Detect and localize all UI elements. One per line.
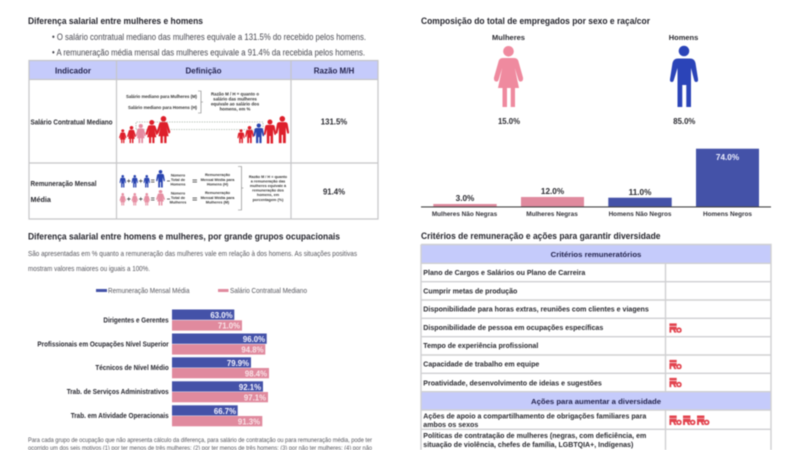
text block: bullets — [52, 32, 366, 58]
rows: critérios: Tempo de experiência profissional — [423, 341, 538, 350]
row: remuneração mensal média: porcentagem (%) — [253, 198, 284, 202]
group: profissionais nível superior — [37, 334, 267, 355]
row: remuneração mensal média: Razão M / H = quanto — [249, 175, 288, 179]
row: remuneração mensal média: Remuneração — [205, 173, 231, 177]
row: remuneração mensal média: Número — [171, 192, 186, 196]
bar chart: razão por grupo ocupacional — [37, 310, 269, 426]
row: remuneração mensal média: homens, em — [257, 193, 280, 197]
bar chart: sexo e raça/cor: 74.0% — [716, 153, 740, 162]
group: técnicos de nível médio: Técnicos de Nível Médio — [95, 365, 169, 372]
rows: critérios: Disponibilidade de pessoa em ocupações específicas — [423, 323, 603, 332]
icon: cálculo homens — [120, 170, 170, 188]
heading: critérios: Critérios de remuneração e ações para garantir diversidade — [421, 231, 660, 242]
group: técnicos de nível médio — [95, 357, 269, 378]
legend: Remuneração Mensal Média — [108, 286, 190, 295]
text block: explicação: São apresentadas em % quanto a remuneração das mulheres vale em relação à dos homens. As situações positivas — [28, 249, 357, 258]
icon: marcador disponibilidade de pessoa — [669, 323, 682, 333]
text block: explicação — [28, 249, 357, 273]
rows: ações: ambos os sexos — [423, 420, 478, 429]
rows: ações: Ações de apoio a compartilhamento de obrigações familiares para — [423, 412, 647, 420]
row: remuneração mensal média: Total de — [171, 178, 185, 182]
rows: ações: Políticas de contratação de mulheres (negras, com deficiência, em — [423, 431, 646, 440]
group: dirigentes e gerentes — [103, 310, 242, 331]
row: salário contratual mediano — [30, 91, 347, 144]
text block: explicação: mostram valores maiores ou iguais a 100%. — [28, 264, 150, 273]
group: técnicos de nível médio: 98.4% — [245, 370, 267, 378]
icon: marcador capacidade de trabalho — [669, 360, 682, 369]
row: salário contratual mediano: Razão M / H = quanto o — [211, 92, 259, 96]
icon: homens 85%: Homens — [669, 33, 698, 42]
table header: Definição — [185, 66, 222, 76]
icon: cálculo mulheres — [120, 190, 170, 206]
bar chart: sexo e raça/cor: Mulheres Negras — [526, 211, 578, 218]
group: serviços administrativos: 97.1% — [244, 394, 266, 402]
panel: critérios de remuneração e ações — [421, 231, 771, 450]
row: remuneração mensal média: Mensal Média para — [201, 196, 235, 200]
row: remuneração mensal média: Mensal Média para — [201, 178, 235, 182]
group: profissionais nível superior: Profissionais em Ocupações Nível Superior — [37, 342, 169, 348]
header: ações para aumentar a diversidade: Ações para aumentar a diversidade — [531, 397, 662, 406]
rows: ações: situação de violência, chefes de família, LGBTQIA+, Indígenas) — [423, 440, 634, 449]
group: serviços administrativos — [67, 381, 268, 402]
panel: diferença salarial entre mulheres e homens — [28, 16, 378, 219]
row: salário contratual mediano: 131.5% — [321, 118, 347, 126]
row: remuneração mensal média: a remuneração das — [251, 180, 285, 184]
text block: nota: Para cada grupo de ocupação que não apresenta cálculo da diferença, para salário de contratação ou para remuneração média, pode ter — [28, 437, 372, 444]
bar chart: sexo e raça/cor: Homens Não Negros — [609, 211, 672, 218]
rows: critérios: Disponibilidade para horas extras, reuniões com clientes e viagens — [423, 305, 649, 314]
icon: grupo de mulheres — [119, 116, 170, 143]
group: atividade operacionais: 91.3% — [238, 418, 260, 426]
group: serviços administrativos: Trab. de Serviços Administrativos — [67, 389, 169, 396]
row: remuneração mensal média: Mulheres (M) — [206, 200, 230, 204]
row: remuneração mensal média — [30, 166, 345, 210]
row: remuneração mensal média: Total de — [171, 196, 185, 200]
icon: homens 85%: 85.0% — [673, 117, 695, 126]
bar chart: sexo e raça/cor: 11.0% — [629, 188, 652, 197]
table: indicadores — [29, 60, 378, 219]
bar chart: sexo e raça/cor: Homens Negros — [703, 211, 752, 218]
icon: marcador proatividade — [669, 378, 682, 387]
bar chart: sexo e raça/cor — [421, 149, 771, 218]
text block: bullets: • A remuneração média mensal das mulheres equivale a 91.4% da recebida pelos homens. — [52, 48, 365, 58]
rows: critérios: Proatividade, desenvolvimento de ideias e sugestões — [423, 378, 602, 387]
legend — [96, 286, 307, 295]
rows: ações — [423, 412, 647, 449]
legend: Salário Contratual Mediano — [230, 286, 307, 295]
row: remuneração mensal média: Média — [30, 195, 52, 204]
icon: mulheres 15% — [492, 33, 525, 126]
row: remuneração mensal média: 91.4% — [323, 188, 345, 196]
heading: diferença salarial: Diferença salarial entre mulheres e homens — [28, 16, 203, 27]
rows: critérios: Capacidade de trabalho em equipe — [423, 360, 539, 369]
row: remuneração mensal média: Remuneração — [205, 191, 231, 195]
group: profissionais nível superior: 94.8% — [241, 346, 264, 355]
row: salário contratual mediano: salário das mulheres — [213, 96, 257, 102]
bar chart: sexo e raça/cor: 3.0% — [456, 194, 475, 203]
row: remuneração mensal média: Homens (H) — [207, 182, 229, 186]
bar chart: sexo e raça/cor: 12.0% — [541, 187, 565, 196]
panel: composição do total de empregados — [421, 16, 771, 218]
icon: mulheres 15%: 15.0% — [498, 117, 520, 126]
table header: Razão M/H — [314, 66, 354, 76]
row: remuneração mensal média: remuneração dos — [252, 188, 284, 192]
group: atividade operacionais — [71, 405, 262, 426]
text block: bullets: • O salário contratual mediano das mulheres equivale a 131.5% do recebido pelos homens. — [52, 32, 366, 42]
row: salário contratual mediano: Salário mediano para Mulheres (M) — [126, 94, 198, 99]
heading: composição: Composição do total de empregados por sexo e raça/cor — [421, 16, 650, 27]
table header — [55, 66, 354, 76]
row: remuneração mensal média: Número — [171, 174, 186, 178]
group: atividade operacionais: 66.7% — [214, 407, 236, 416]
rows: critérios — [423, 268, 649, 387]
group: dirigentes e gerentes: 63.0% — [210, 311, 233, 320]
group: serviços administrativos: 92.1% — [239, 383, 261, 392]
table: critérios remuneratórios — [421, 244, 771, 450]
table header: Indicador — [55, 66, 91, 76]
rows: critérios: Plano de Cargos e Salários ou Plano de Carreira — [423, 268, 586, 277]
heading: grandes grupos ocupacionais: Diferença salarial entre homens e mulheres, por grande grupos ocupacionais — [28, 232, 340, 242]
row: remuneração mensal média: Homens — [171, 182, 185, 186]
row: salário contratual mediano: homens, em % — [220, 106, 250, 112]
text block: nota — [28, 437, 372, 450]
icon: grupo de homens — [237, 116, 289, 144]
row: remuneração mensal média: Remuneração Mensal — [30, 179, 96, 188]
group: dirigentes e gerentes: Dirigentes e Gerentes — [103, 318, 169, 324]
header: critérios remuneratórios: Critérios remuneratórios — [551, 250, 641, 259]
group: atividade operacionais: Trab. em Atividade Operacionais — [71, 413, 169, 420]
row: remuneração mensal média: Mulheres — [170, 200, 186, 204]
rows: critérios: Cumprir metas de produção — [423, 286, 518, 295]
row: remuneração mensal média: mulheres equivale à — [250, 184, 287, 188]
row: salário contratual mediano: Salário mediano para Homens (H) — [128, 105, 198, 110]
icon: mulheres 15%: Mulheres — [492, 33, 525, 42]
bar chart: sexo e raça/cor: Mulheres Não Negras — [432, 211, 498, 218]
panel: grupos ocupacionais — [28, 232, 372, 450]
row: salário contratual mediano: equivale ao salário dos — [211, 102, 260, 106]
icon: homens 85% — [669, 33, 698, 126]
group: profissionais nível superior: 96.0% — [243, 335, 265, 344]
group: técnicos de nível médio: 79.9% — [227, 359, 249, 368]
row: salário contratual mediano: Salário Contratual Mediano — [30, 118, 113, 126]
group: dirigentes e gerentes: 71.0% — [218, 322, 240, 331]
icon: marcadores ações de apoio — [669, 416, 710, 425]
